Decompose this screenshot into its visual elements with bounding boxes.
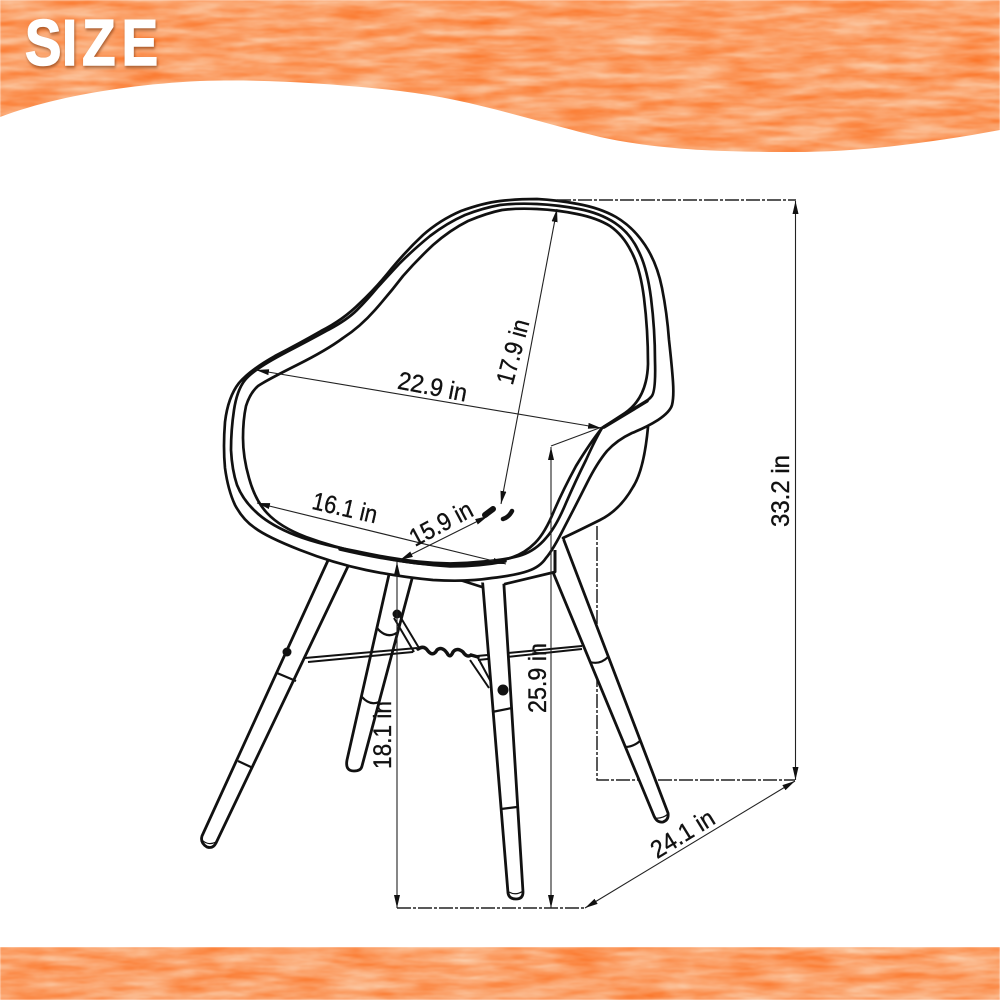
- front leg: [482, 570, 523, 899]
- dimension: arm height 25.9 in: 25.9 in: [524, 643, 552, 713]
- dimension: depth 24.1 in: [585, 781, 795, 908]
- chair seat shell: [224, 199, 673, 587]
- left leg: [202, 556, 351, 848]
- dimension: arm width 22.9 in: [256, 367, 601, 428]
- dimension: seat height 18.1 in: 18.1 in: [369, 701, 397, 769]
- dimension: total height 33.2 in: 33.2 in: [767, 455, 795, 527]
- rim thickened front edge: [340, 401, 647, 566]
- chair legs and stretchers: [202, 530, 668, 899]
- shell underside lines: [460, 427, 648, 587]
- dimension: depth 24.1 in: 24.1 in: [646, 804, 720, 864]
- title: SIZE: [25, 7, 158, 79]
- dimension: arm height 25.9 in: [524, 427, 602, 908]
- dimension: back height 17.9 in: 17.9 in: [491, 316, 535, 387]
- dimension: seat height guides: [397, 907, 585, 909]
- dimension: arm width 22.9 in: 22.9 in: [395, 367, 470, 408]
- back leg: [347, 570, 413, 771]
- footer textured orange band: [0, 947, 1000, 1000]
- dimension: seat width 16.1 in: 16.1 in: [309, 487, 380, 529]
- hidden depth guide lines behind legs: [597, 526, 795, 780]
- rim middle line: [231, 204, 655, 563]
- seat bracket: [554, 550, 556, 572]
- header textured orange wave band: [0, 0, 1000, 160]
- shell underside fill: [460, 427, 648, 584]
- outer rim: [224, 199, 673, 581]
- right leg: [550, 530, 668, 822]
- seat mark: right dash: [503, 511, 512, 519]
- dimension: seat depth 15.9 in: 15.9 in: [405, 496, 478, 552]
- rim inner line: [243, 209, 648, 565]
- dimension: seat width 16.1 in: [257, 487, 506, 564]
- dimension: back height 17.9 in: [491, 209, 557, 504]
- stretcher bars: [305, 613, 582, 688]
- seat mark: left dash: [485, 509, 493, 515]
